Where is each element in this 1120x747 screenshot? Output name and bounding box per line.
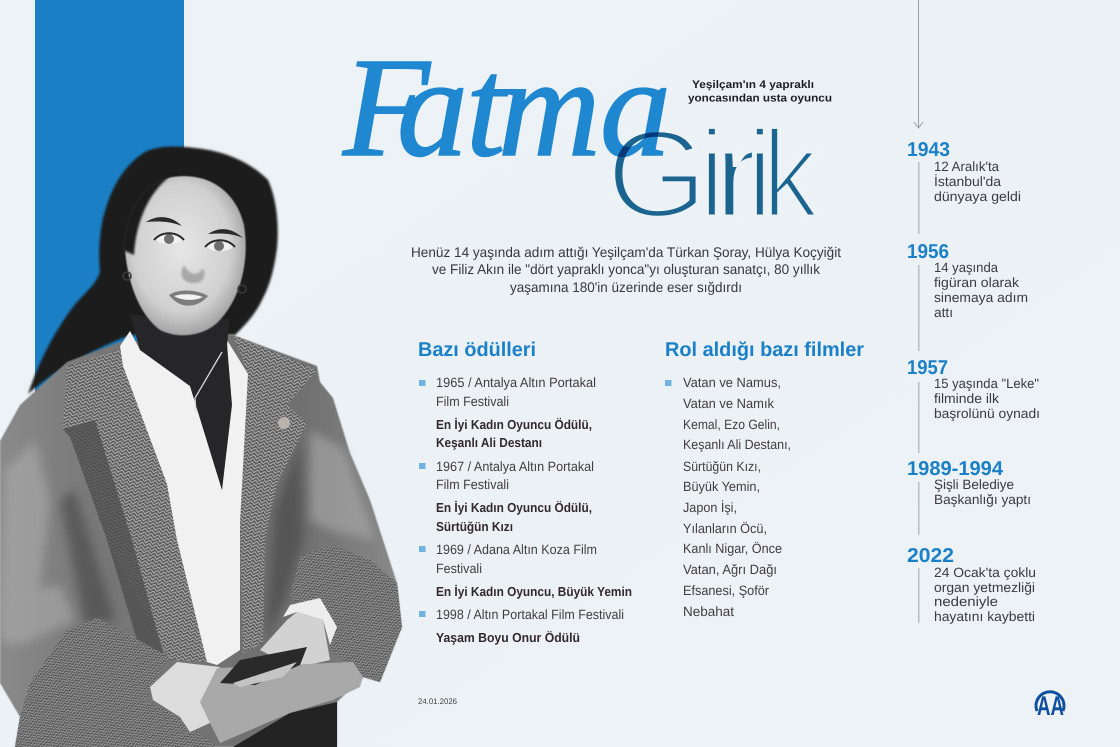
blue vertical band [35,0,184,400]
last name: Girik: i [746,105,774,244]
hair [28,147,278,394]
dark lower garment [233,702,337,747]
timeline entry 1956 [907,241,1028,351]
intro paragraph [411,244,841,295]
award 1998: 1998 / Altın Portakal Film Festivali [436,607,624,622]
dark turtleneck [130,315,232,490]
heading: films: Rol aldığı bazı filmler [665,339,864,361]
last name: Girik: k [762,105,819,244]
award 1967: Film Festivali [436,477,509,492]
timeline entry 1943: 1943 [907,139,950,161]
film list: Büyük Yemin, [683,479,760,494]
last name: Girik: r [711,105,765,244]
right lapel [233,335,317,653]
award 1969 [419,542,632,599]
award 1969: 1969 / Adana Altın Koza Film [436,542,597,557]
nose [181,265,205,283]
coat button [278,417,290,429]
first name: Fatma: Fatma [342,28,671,186]
icon: AA logo [1036,691,1064,721]
subtitle [688,79,832,104]
coat sleeve highlights [0,430,375,645]
last name: Girik: i [698,105,726,244]
leaves and wrapped item [220,647,307,685]
film list: Vatan ve Namus, [683,375,781,390]
film list: Keşanlı Ali Destanı, [683,437,791,452]
eyes [154,233,235,251]
subtitle: Yeşilçam'ın 4 yapraklı [692,79,814,91]
timeline entry 2022: 24 Ocak'ta çoklu [934,565,1036,580]
timeline entry 2022: nedeniyle [934,594,998,609]
timeline entry 2022: hayatını kaybetti [934,609,1035,624]
timeline entry 1943: 12 Aralık'ta [934,159,999,174]
date: 24.01.2026 [418,697,458,706]
timeline entry 1956: sinemaya adım [934,290,1028,305]
award 1969: En İyi Kadın Oyuncu, Büyük Yemin [436,584,632,599]
award 1969: Festivali [436,561,482,576]
left cuff [15,618,170,747]
timeline entry 1957: filminde ilk [934,391,999,406]
timeline entry 2022: organ yetmezliği [934,580,1035,595]
film list: Kanlı Nigar, Önce [683,541,782,556]
award 1967: En İyi Kadın Oyuncu Ödülü, [436,500,592,515]
timeline entry 2022: 2022 [907,545,954,567]
film list bullet [665,380,672,386]
photo: Fatma Girik portrait [0,147,402,747]
timeline entry 1957: başrolünü oynadı [934,406,1040,421]
timeline entry 1956: attı [934,305,953,320]
coat lower hem [113,700,217,747]
film list: Japon İşi, [683,500,737,515]
eyebrows [146,217,243,238]
award 1965: Keşanlı Ali Destanı [436,435,542,450]
film list: Yılanların Öcü, [683,521,767,536]
earrings [123,272,246,293]
film list: Vatan ve Namık [683,396,774,411]
heading: awards: Bazı ödülleri [418,339,536,361]
coat sleeve shadows [60,440,303,640]
award 1967 [419,459,594,534]
timeline entry 1956: 1956 [907,241,949,263]
timeline entry 1989-1994: Başkanlığı yaptı [934,492,1031,507]
last name: Girik: G [606,105,708,244]
award 1998 [419,607,624,645]
timeline entry 1943: İstanbul'da [934,174,1001,189]
film list: Sürtüğün Kızı, [683,459,761,474]
last name: Girik [606,105,819,244]
timeline entry 1943 [907,139,1021,234]
timeline entry 1956: 14 yaşında [934,260,998,275]
right hand [260,612,330,668]
intro paragraph: yaşamına 180'in üzerinde eser sığdırdı [510,279,742,295]
left lapel [63,350,207,662]
white cardigan [120,331,248,665]
mouth [169,291,208,306]
award 1965: Film Festivali [436,394,509,409]
timeline [907,0,1040,624]
intro paragraph: ve Filiz Akın ile "dört yapraklı yonca"yı oluşturan sanatçı, 80 yıllık [432,261,821,277]
hair strand shadow at temple [123,174,173,255]
panel: awards [418,339,632,645]
intro paragraph: Henüz 14 yaşında adım attığı Yeşilçam'da Türkan Şoray, Hülya Koçyiğit [411,244,841,260]
film list: Nebahat [683,604,734,619]
award 1998: Yaşam Boyu Onur Ödülü [436,630,580,645]
award 1967: Sürtüğün Kızı [436,519,513,534]
timeline entry 1989-1994: Şişli Belediye [934,477,1014,492]
panel: films [665,339,864,619]
film list: Kemal, Ezo Gelin, [683,417,780,432]
timeline entry 1956: figüran olarak [934,275,1019,290]
white sleeve cuff [283,598,337,645]
left lapel dark edge [63,420,165,660]
timeline entry 1989-1994 [907,458,1031,535]
timeline entry 1957: 1957 [907,357,948,379]
coat [0,335,402,747]
award 1965: En İyi Kadın Oyuncu Ödülü, [436,417,592,432]
timeline entry 1989-1994: 1989-1994 [907,458,1004,480]
film list: Efsanesi, Şoför [683,583,769,598]
award 1967: 1967 / Antalya Altın Portakal [436,459,594,474]
left hand [150,662,220,732]
icon: AA logo: AA [1037,691,1064,721]
timeline entry 1957: 15 yaşında "Leke" [934,376,1039,391]
arrow [914,0,923,128]
timeline entry 1943: dünyaya geldi [934,189,1021,204]
timeline entry 1957 [907,357,1040,453]
award 1965 [419,375,596,450]
paper package [200,662,363,743]
face [125,176,246,335]
subtitle: yoncasından usta oyuncu [688,92,832,104]
film list [683,375,791,619]
right cuff [290,545,402,682]
timeline entry 2022 [907,545,1036,624]
award 1965: 1965 / Antalya Altın Portakal [436,375,596,390]
film list: Vatan, Ağrı Dağı [683,562,777,577]
necklace [195,352,222,412]
